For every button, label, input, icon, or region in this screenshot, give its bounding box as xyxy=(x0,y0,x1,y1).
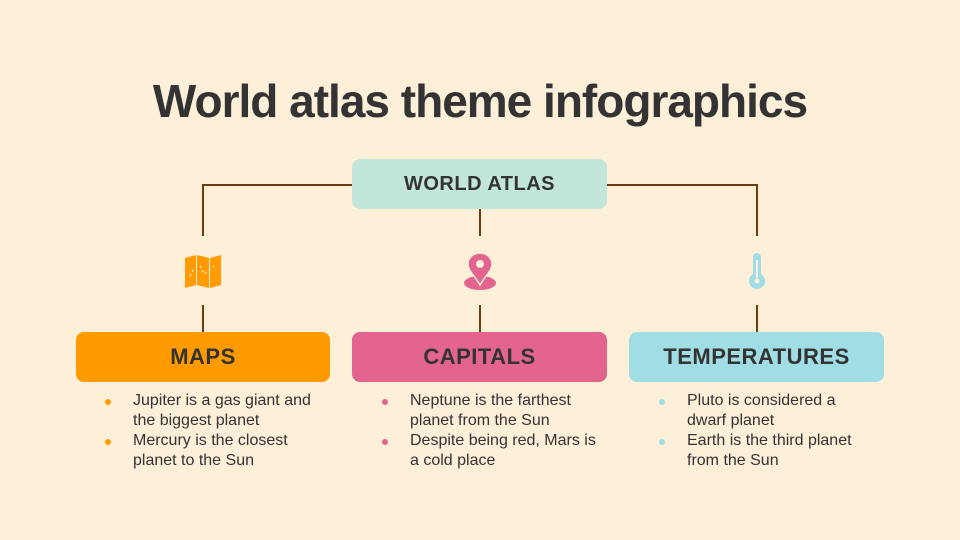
text: capitals: Despite being red, Mars is a cold place xyxy=(410,432,596,469)
icon: pin xyxy=(464,254,496,290)
box: maps: MAPS xyxy=(170,344,236,369)
icon: thermometer xyxy=(749,253,765,289)
text: capitals xyxy=(382,392,596,469)
text: maps xyxy=(105,392,311,469)
box: world atlas xyxy=(352,159,607,209)
text: temperatures xyxy=(659,392,852,469)
box: capitals xyxy=(352,332,607,382)
box: maps xyxy=(76,332,330,382)
text: capitals: Neptune is the farthest planet from the Sun xyxy=(410,392,571,429)
box: temperatures: TEMPERATURES xyxy=(663,344,850,369)
box: temperatures xyxy=(629,332,884,382)
box: world atlas: WORLD ATLAS xyxy=(404,172,555,194)
text: maps: Jupiter is a gas giant and the biggest planet xyxy=(133,392,311,429)
title: World atlas theme infographics xyxy=(153,75,807,127)
box: capitals: CAPITALS xyxy=(423,344,536,369)
text: maps: Mercury is the closest planet to the Sun xyxy=(133,432,288,469)
text: temperatures: Earth is the third planet from the Sun xyxy=(687,432,852,469)
text: temperatures: Pluto is considered a dwarf planet xyxy=(687,392,836,429)
icon: map xyxy=(185,255,221,288)
